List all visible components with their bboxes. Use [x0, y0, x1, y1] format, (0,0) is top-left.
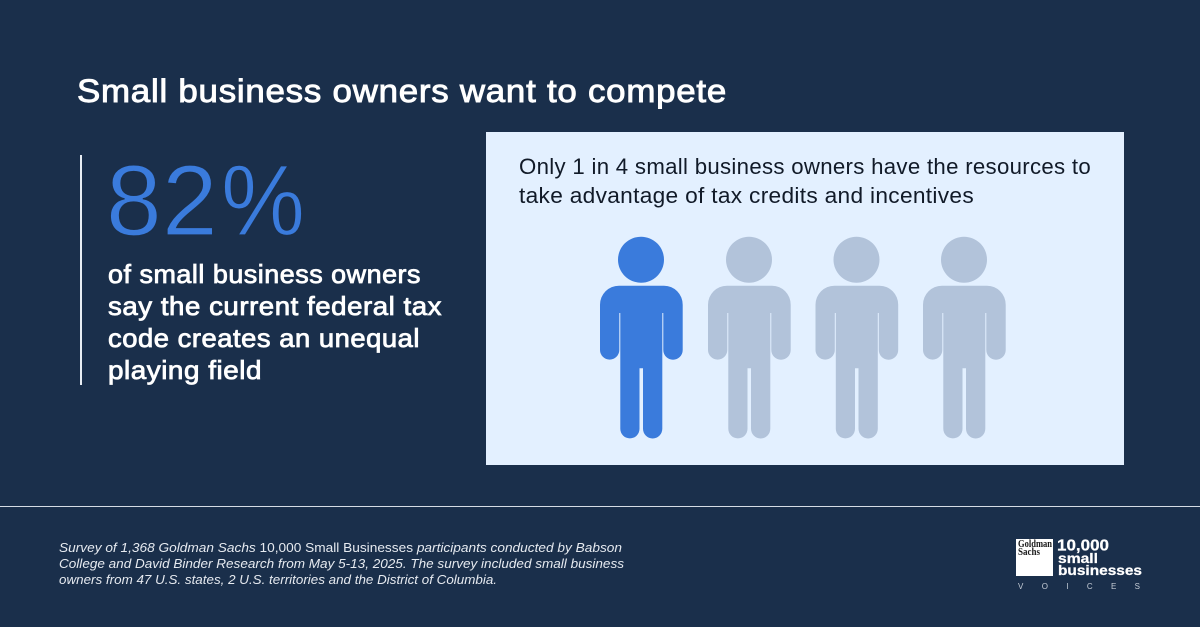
logo [1016, 538, 1142, 591]
footnote: Survey of 1,368 Goldman Sachs 10,000 Small Businesses participants conducted by Babson [59, 541, 622, 555]
logo: Sachs [1018, 547, 1040, 558]
icon: person 3 [816, 237, 898, 438]
panel text: Only 1 in 4 small business owners have the resources to [519, 154, 1091, 179]
icon: person 4 [923, 237, 1006, 438]
logo: Goldman [1018, 539, 1052, 550]
icon: person 2 [708, 237, 791, 438]
panel: 82% statistic [81, 145, 442, 385]
statistic description: playing field [108, 357, 262, 385]
statistic description: say the current federal tax [108, 293, 442, 321]
big number: 82 [106, 145, 218, 257]
footnote: owners from 47 U.S. states, 2 U.S. territories and the District of Columbia. [59, 573, 497, 587]
icon: highlighted person [600, 237, 683, 438]
big number: % [221, 145, 305, 257]
panel text: take advantage of tax credits and incentives [519, 183, 974, 208]
logo: businesses [1058, 562, 1142, 578]
footnote: College and David Binder Research from May 5-13, 2025. The survey included small business [59, 557, 624, 571]
panel text [519, 154, 1091, 208]
logo: small [1058, 550, 1098, 566]
logo: 10,000 [1057, 538, 1109, 554]
title: Small business owners want to compete [77, 73, 727, 109]
statistic description: code creates an unequal [108, 325, 420, 353]
statistic description: of small business owners [108, 261, 421, 289]
big number [106, 145, 305, 257]
logo: VOICES [1018, 582, 1140, 591]
statistic description [108, 261, 442, 385]
panel: 1 in 4 owners [486, 132, 1124, 465]
footnote [59, 541, 624, 587]
